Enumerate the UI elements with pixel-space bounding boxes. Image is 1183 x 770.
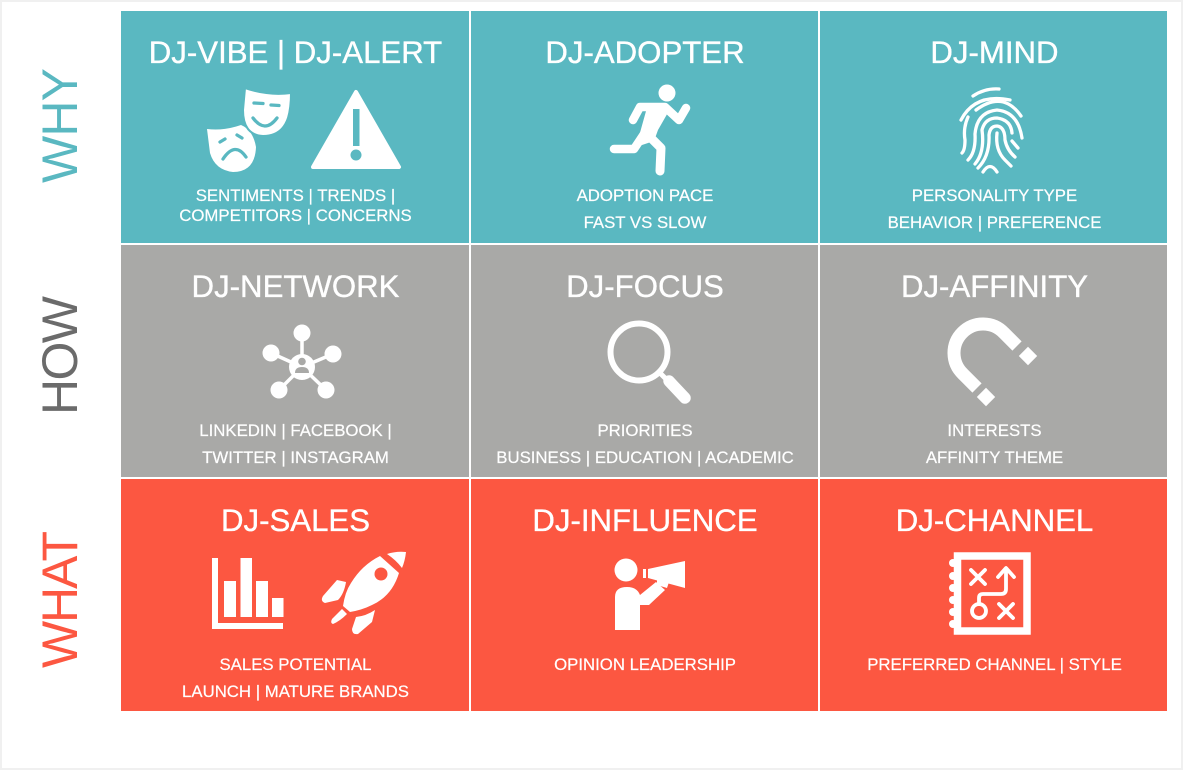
caption: network: LINKEDIN | FACEBOOK |	[199, 421, 392, 440]
heading: DJ-INFLUENCE: DJ-INFLUENCE	[532, 503, 758, 538]
icon: running person	[614, 84, 686, 171]
caption: network	[199, 421, 392, 467]
heading: DJ-FOCUS: DJ-FOCUS	[566, 269, 724, 304]
caption: affinity: AFFINITY THEME	[926, 448, 1063, 467]
icon: strategy notebook	[949, 556, 1027, 631]
panel: DJ-AFFINITY	[820, 245, 1167, 477]
caption: adopter	[577, 186, 713, 232]
panel: DJ-NETWORK	[121, 245, 469, 477]
panel: DJ-FOCUS	[471, 245, 818, 477]
caption: adopter: ADOPTION PACE	[577, 186, 713, 205]
row label: WHY: WHY	[32, 68, 88, 183]
caption: sales	[182, 655, 409, 701]
panel: DJ-INFLUENCE	[471, 479, 818, 711]
panel: DJ-VIBE and DJ-ALERT	[121, 11, 469, 243]
icon: fingerprint	[961, 89, 1022, 172]
heading: DJ-NETWORK: DJ-NETWORK	[192, 269, 400, 304]
icon: network hub	[262, 324, 342, 398]
icon: bar chart	[212, 558, 284, 629]
row label: HOW: HOW	[32, 295, 88, 415]
heading: DJ-AFFINITY: DJ-AFFINITY	[901, 269, 1088, 304]
icon: person with megaphone	[614, 558, 685, 630]
caption: mind: BEHAVIOR | PREFERENCE	[888, 213, 1101, 232]
heading: DJ-SALES: DJ-SALES	[221, 503, 370, 538]
panel: DJ-CHANNEL	[820, 479, 1167, 711]
panel: DJ-MIND	[820, 11, 1167, 243]
heading: DJ-ADOPTER: DJ-ADOPTER	[545, 35, 745, 70]
caption: focus: PRIORITIES	[597, 421, 693, 440]
caption: network: TWITTER | INSTAGRAM	[202, 448, 389, 467]
caption: mind: PERSONALITY TYPE	[912, 186, 1077, 205]
heading: DJ-VIBE | DJ-ALERT: DJ-VIBE | DJ-ALERT	[149, 35, 442, 70]
caption: focus	[496, 421, 794, 467]
caption: mind	[888, 186, 1101, 232]
caption: sales: LAUNCH | MATURE BRANDS	[182, 682, 409, 701]
icon: warning triangle	[313, 92, 399, 167]
caption: vibe and alert: COMPETITORS | CONCERNS	[179, 206, 412, 225]
caption: adopter: FAST VS SLOW	[584, 213, 707, 232]
heading: DJ-CHANNEL: DJ-CHANNEL	[896, 503, 1093, 538]
caption: channel: PREFERRED CHANNEL | STYLE	[867, 655, 1122, 674]
caption: vibe and alert: SENTIMENTS | TRENDS |	[196, 186, 395, 205]
icon: magnet	[954, 324, 1037, 406]
icon: rocket	[322, 552, 406, 634]
caption: focus: BUSINESS | EDUCATION | ACADEMIC	[496, 448, 794, 467]
panel: DJ-SALES	[121, 479, 469, 711]
caption: influence: OPINION LEADERSHIP	[554, 655, 736, 674]
caption: vibe and alert	[179, 186, 412, 225]
icon: theatre masks	[207, 88, 291, 172]
heading: DJ-MIND: DJ-MIND	[930, 35, 1059, 70]
row label: WHAT: WHAT	[32, 531, 88, 668]
panel: DJ-ADOPTER	[471, 11, 818, 243]
icon: magnifying glass	[610, 324, 685, 398]
caption: sales: SALES POTENTIAL	[219, 655, 372, 674]
caption: affinity	[926, 421, 1063, 467]
caption: affinity: INTERESTS	[947, 421, 1042, 440]
